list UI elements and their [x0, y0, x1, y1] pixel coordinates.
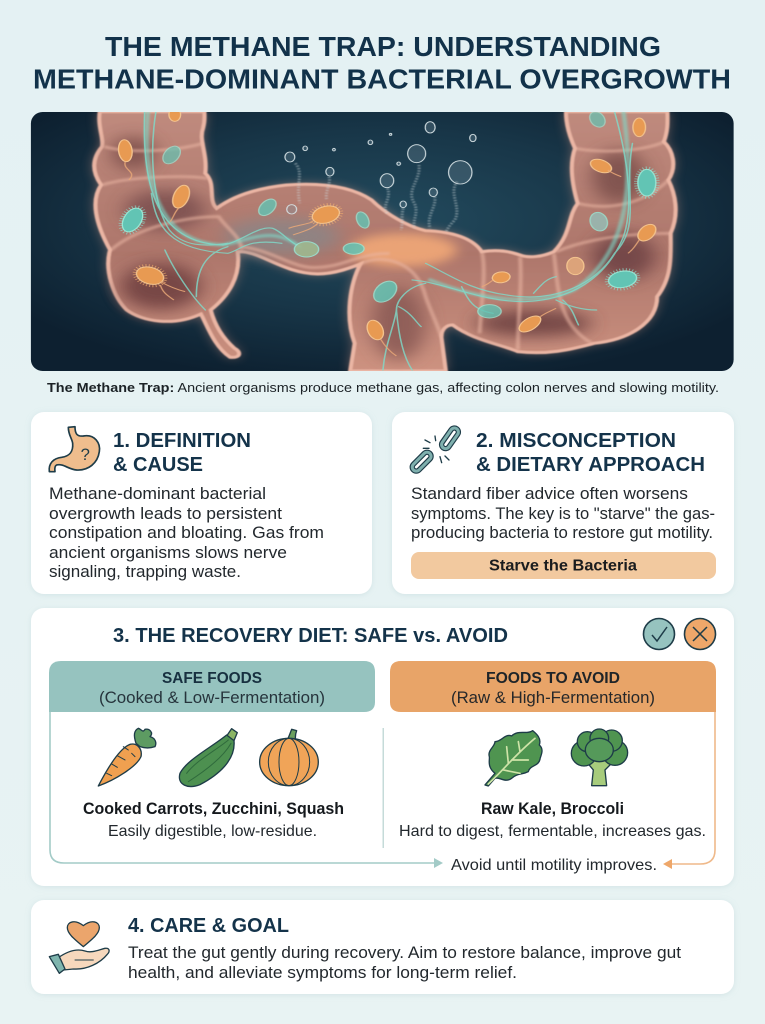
foods to avoid text: Hard to digest, fermentable, increases gas.: [399, 823, 706, 840]
heading: 4. CARE & GOAL: [128, 915, 289, 937]
panel: the recovery diet: [31, 608, 734, 886]
bacteria orange: [117, 108, 660, 341]
body text: Treat the gut gently during recovery. Aim to restore balance, improve gut: [128, 943, 681, 962]
safe foods text: Cooked Carrots, Zucchini, Squash: [83, 800, 344, 818]
orange hot zone: [349, 233, 457, 267]
methane trails: [295, 163, 457, 232]
colon glow: [94, 112, 676, 371]
safe foods header: SAFE FOODS: [162, 670, 262, 687]
heading: & CAUSE: [113, 454, 203, 476]
heading: [476, 430, 705, 476]
methane bubbles: [285, 122, 476, 214]
body text: [411, 484, 715, 542]
panel: definition and cause: [31, 412, 372, 594]
note: Avoid until motility improves.: [451, 857, 657, 874]
icon: broccoli: [571, 729, 628, 786]
foods to avoid header: FOODS TO AVOID: [486, 670, 620, 687]
heading: 2. MISCONCEPTION: [476, 430, 676, 452]
heading: [113, 430, 251, 476]
icon: stomach with question mark: ?: [81, 445, 90, 464]
icon: heart over hand: [49, 922, 109, 973]
icon: check: [644, 618, 674, 650]
icon: cross: [684, 618, 716, 650]
body text: [49, 484, 324, 581]
panel: care and goal: [31, 900, 734, 994]
foods to avoid header: (Raw & High-Fermentation): [451, 689, 655, 707]
icon: kale: [485, 731, 542, 786]
body text: Methane-dominant bacterial: [49, 484, 266, 503]
colon interior shading: [111, 137, 655, 360]
connector arrow: safe: [50, 705, 443, 868]
body text: Standard fiber advice often worsens: [411, 484, 688, 503]
safe foods header: [49, 661, 375, 712]
icon: squash pumpkin: [260, 729, 318, 786]
body text: symptoms. The key is to "starve" the gas-: [411, 504, 715, 523]
body text: [128, 943, 681, 982]
heading: & DIETARY APPROACH: [476, 454, 705, 476]
safe foods text: Easily digestible, low-residue.: [108, 823, 317, 840]
heading: 3. THE RECOVERY DIET: SAFE vs. AVOID: [113, 625, 508, 647]
heading: 1. DEFINITION: [113, 430, 251, 452]
bacteria fringe: [116, 168, 658, 292]
title: [33, 31, 731, 94]
callout: starve the bacteria: [411, 552, 716, 579]
icon: broken chain: [411, 426, 460, 473]
bacteria tails: [125, 162, 639, 356]
panel: misconception and dietary approach: [392, 412, 734, 594]
body text: ancient organisms slows nerve: [49, 543, 287, 562]
foods to avoid text: [399, 800, 706, 840]
foods to avoid header: [390, 661, 716, 712]
icon: stomach with question mark: [49, 427, 100, 472]
icon: carrot: [98, 728, 156, 786]
foods to avoid text: Raw Kale, Broccoli: [481, 800, 624, 818]
body text: constipation and bloating. Gas from: [49, 523, 324, 542]
body text: overgrowth leads to persistent: [49, 504, 282, 523]
icon: zucchini: [179, 729, 237, 786]
body text: health, and alleviate symptoms for long-term relief.: [128, 963, 517, 982]
title: METHANE-DOMINANT BACTERIAL OVERGROWTH: [33, 64, 731, 94]
hero caption: The Methane Trap: Ancient organisms produce methane gas, affecting colon nerves and slowing motility.: [47, 380, 719, 395]
hero illustration: colon with methane bacteria: [30, 108, 735, 375]
body text: producing bacteria to restore gut motility.: [411, 523, 713, 542]
body text: signaling, trapping waste.: [49, 562, 241, 581]
callout: starve the bacteria: Starve the Bacteria: [489, 558, 637, 574]
title: THE METHANE TRAP: UNDERSTANDING: [105, 31, 661, 62]
haustra folds: [102, 142, 671, 350]
colon body: [94, 112, 676, 371]
safe foods header: (Cooked & Low-Fermentation): [99, 689, 325, 707]
nerve fibres: [144, 112, 632, 370]
safe foods text: [83, 800, 344, 840]
connector arrow: avoid: [663, 705, 715, 869]
bacteria teal: [118, 110, 656, 318]
